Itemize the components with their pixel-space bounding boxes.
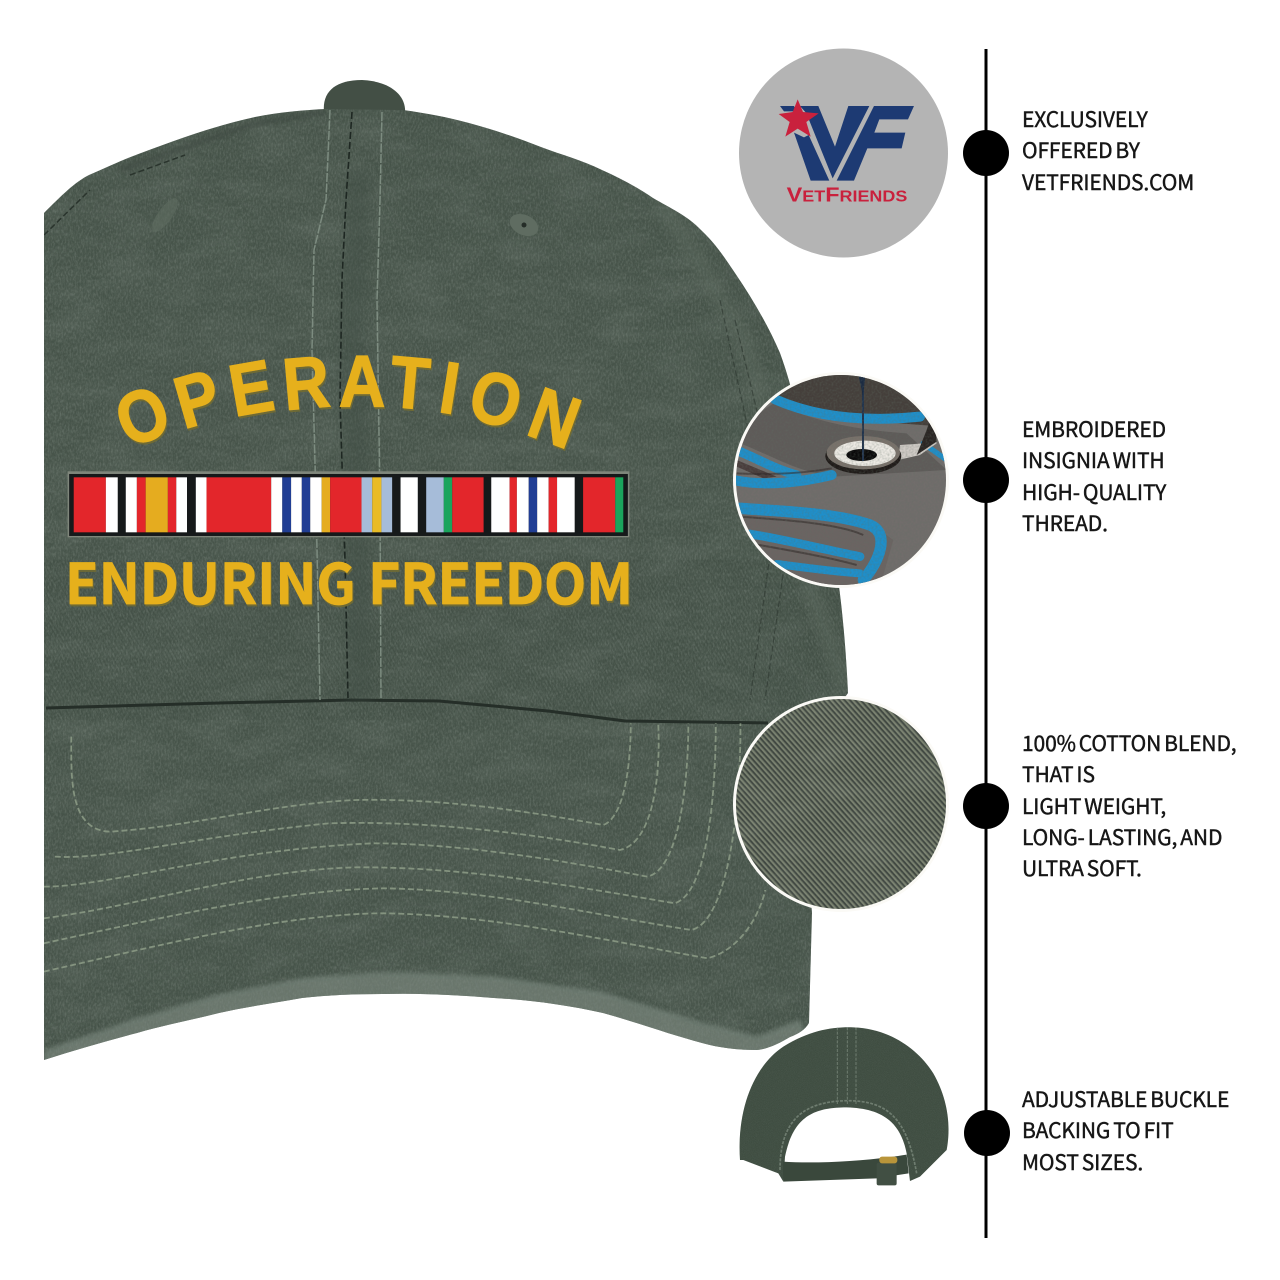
cap back panel bbox=[740, 1027, 948, 1182]
crown seam shadows bbox=[46, 700, 768, 723]
text block: embroidered insignia: THREAD. bbox=[1022, 508, 1108, 538]
text block: exclusively offered: VETFRIENDS.COM bbox=[1022, 167, 1194, 197]
embroidered text: OPERATION: R bbox=[279, 339, 333, 426]
embroidered text: OPERATION: O bbox=[104, 368, 181, 464]
main cap front view bbox=[40, 70, 855, 1075]
circle: embroidery close-up bbox=[730, 370, 955, 590]
timeline dot 1 bbox=[963, 130, 1009, 176]
embroidered text: OPERATION bbox=[104, 339, 591, 465]
text block: adjustable buckle bbox=[1022, 1084, 1229, 1177]
service ribbon bar bbox=[68, 471, 629, 537]
embroidered text: OPERATION: A bbox=[339, 339, 385, 422]
text block: adjustable buckle: BACKING TO FIT bbox=[1022, 1115, 1174, 1145]
circle: back of cap bbox=[733, 1023, 957, 1187]
text block: cotton blend: ULTRA SOFT. bbox=[1022, 853, 1142, 883]
circle: cotton fabric close-up bbox=[730, 694, 955, 914]
logo wordmark: VETFRIENDS bbox=[787, 184, 907, 206]
text block: exclusively offered: OFFERED BY bbox=[1022, 135, 1140, 165]
text block: adjustable buckle: ADJUSTABLE BUCKLE bbox=[1022, 1084, 1229, 1114]
text block: embroidered insignia: EMBROIDERED bbox=[1022, 414, 1166, 444]
adjustable strap bbox=[783, 1155, 909, 1182]
timeline line bbox=[984, 49, 988, 1238]
text block: cotton blend: LIGHT WEIGHT, bbox=[1022, 791, 1166, 821]
timeline dot 3 bbox=[963, 783, 1009, 829]
embroidered text: OPERATION: N bbox=[519, 371, 591, 465]
text block: cotton blend bbox=[1022, 728, 1236, 883]
circle: VetFriends logo bbox=[739, 48, 948, 258]
text block: embroidered insignia: INSIGNIA WITH bbox=[1022, 445, 1165, 475]
embroidered text: OPERATION: O bbox=[461, 352, 530, 445]
worn lighter visor edge bbox=[44, 970, 804, 1060]
cap crown and visor body bbox=[40, 70, 855, 1075]
embroidered text: OPERATION: I bbox=[435, 345, 465, 430]
top button bbox=[324, 80, 405, 114]
text block: cotton blend: THAT IS bbox=[1022, 759, 1095, 789]
visor stitching bbox=[44, 723, 765, 972]
embroidered text: OPERATION: T bbox=[387, 340, 433, 426]
timeline dot 4 bbox=[964, 1110, 1010, 1156]
timeline dot 2 bbox=[963, 457, 1009, 503]
buckle bbox=[877, 1163, 897, 1185]
needle eyelet bbox=[900, 442, 937, 460]
text block: embroidered insignia bbox=[1022, 414, 1167, 538]
icon: VF logo mark bbox=[779, 99, 914, 206]
text block: embroidered insignia: HIGH- QUALITY bbox=[1022, 477, 1166, 507]
text block: exclusively offered: EXCLUSIVELY bbox=[1022, 104, 1148, 134]
crown seams bbox=[312, 110, 330, 700]
text block: adjustable buckle: MOST SIZES. bbox=[1022, 1147, 1143, 1177]
embroidered text: ENDURING FREEDOM: ENDURING FREEDOM bbox=[65, 540, 633, 621]
eyelets bbox=[510, 214, 538, 236]
embroidered text: OPERATION: P bbox=[165, 353, 229, 444]
text block: cotton blend: 100% COTTON BLEND, bbox=[1022, 728, 1236, 758]
text block: exclusively offered bbox=[1022, 104, 1194, 197]
text block: cotton blend: LONG- LASTING, AND bbox=[1022, 822, 1222, 852]
embroidered text: OPERATION: E bbox=[223, 343, 279, 432]
